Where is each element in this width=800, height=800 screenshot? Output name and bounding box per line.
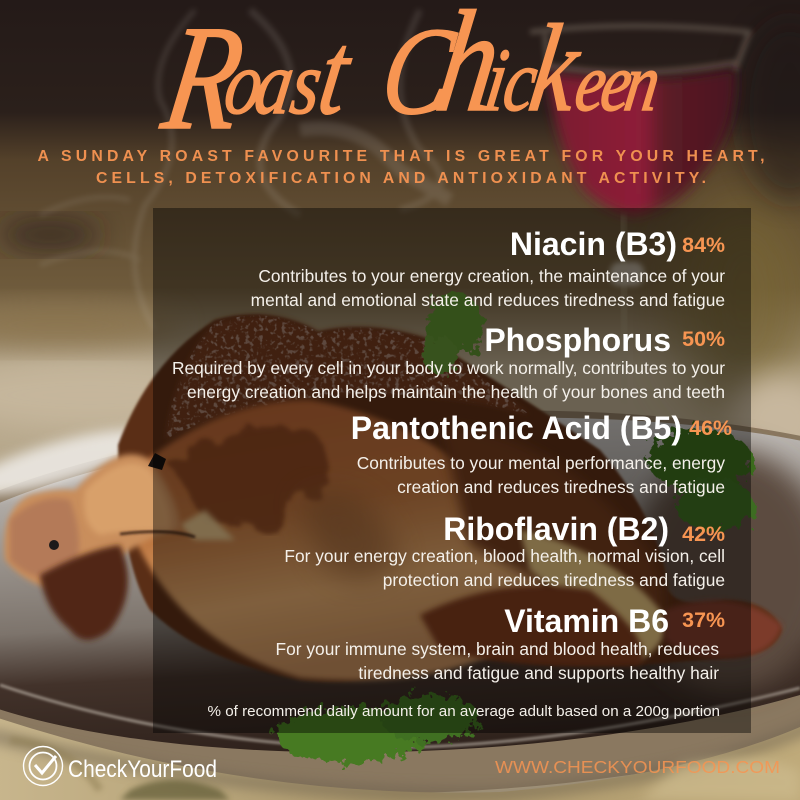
nutrient: Niacin: Contributes to your energy creation, the maintenance of your xyxy=(258,266,725,286)
right side breast xyxy=(440,425,663,650)
nutrient: Riboflavin: protection and reduces tiredness and fatigue xyxy=(383,570,725,590)
nutrient: Pantothenic Acid: 46% xyxy=(689,416,732,440)
parsley on chicken and plate xyxy=(275,293,483,763)
nutrient: Vitamin B6 xyxy=(276,603,725,683)
breast xyxy=(132,400,544,680)
logo: CheckYourFood: CheckYourFood xyxy=(68,756,217,783)
icon: check circle xyxy=(24,746,62,786)
subtitle: A SUNDAY ROAST FAVOURITE THAT IS GREAT FOR YOUR HEART, xyxy=(38,148,764,165)
footnote: % of recommend daily amount for an average adult based on a 200g portion xyxy=(208,703,720,720)
nutrient: Vitamin B6: 37% xyxy=(682,608,725,632)
nutrient: Vitamin B6: tiredness and fatigue and supports healthy hair xyxy=(358,663,719,683)
title: o xyxy=(219,33,270,133)
title: e xyxy=(570,38,613,129)
nutrient: Pantothenic Acid xyxy=(351,410,732,497)
glaze speckle xyxy=(166,316,527,438)
website: WWW.CHECKYOURFOOD.COM xyxy=(495,757,780,777)
nutrient: Riboflavin: For your energy creation, blood health, normal vision, cell xyxy=(284,546,725,566)
title: s xyxy=(285,33,329,133)
wine glass xyxy=(530,26,750,400)
nutrient: Phosphorus: energy creation and helps maintain the health of your bones and teeth xyxy=(187,382,725,402)
title: n xyxy=(619,38,666,129)
nutrient: Niacin xyxy=(251,226,725,310)
tail piece xyxy=(665,600,782,658)
glazed back skin xyxy=(165,315,530,440)
title: c xyxy=(497,32,544,130)
title: C xyxy=(373,1,464,140)
roast chicken xyxy=(4,300,782,682)
title: a xyxy=(249,33,301,133)
silhouette xyxy=(118,315,782,682)
plate xyxy=(0,386,800,800)
title: t xyxy=(311,9,361,139)
logo: CheckYourFood xyxy=(24,746,217,786)
nutrient: Pantothenic Acid: creation and reduces tiredness and fatigue xyxy=(397,477,725,497)
smoke wisps xyxy=(40,10,450,330)
nutrient: Phosphorus: 50% xyxy=(682,327,725,351)
nutrient: Vitamin B6: Vitamin B6 xyxy=(504,603,669,639)
subtitle xyxy=(38,148,764,187)
nutrient: Phosphorus: Phosphorus xyxy=(484,322,671,358)
nutrient: Riboflavin: 42% xyxy=(682,522,725,546)
cloth pattern xyxy=(10,740,800,800)
nutrient: Phosphorus xyxy=(172,322,725,402)
nutrient: Pantothenic Acid: Pantothenic Acid (B5) xyxy=(351,410,682,446)
subtitle: CELLS, DETOXIFICATION AND ANTIOXIDANT ACTIVITY. xyxy=(96,170,706,187)
wing xyxy=(420,586,643,666)
nutrient: Phosphorus: Required by every cell in your body to work normally, contributes to your xyxy=(172,358,725,378)
nutrient: Riboflavin: Riboflavin (B2) xyxy=(443,511,669,547)
nutrient: Niacin: Niacin (B3) xyxy=(510,226,677,262)
parsley behind chicken xyxy=(648,428,755,531)
title: e xyxy=(595,38,639,129)
nutrient: Vitamin B6: For your immune system, brain and blood health, reduces xyxy=(276,639,719,659)
drumstick xyxy=(4,454,180,589)
nutrient: Niacin: 84% xyxy=(682,233,725,257)
translucent dark panel xyxy=(153,208,751,733)
nutrient: Niacin: mental and emotional state and reduces tiredness and fatigue xyxy=(251,290,725,310)
nutrient: Pantothenic Acid: Contributes to your mental performance, energy xyxy=(357,453,725,473)
nutrient: Riboflavin xyxy=(284,511,725,590)
title: k xyxy=(522,0,590,137)
title: i xyxy=(479,30,515,130)
